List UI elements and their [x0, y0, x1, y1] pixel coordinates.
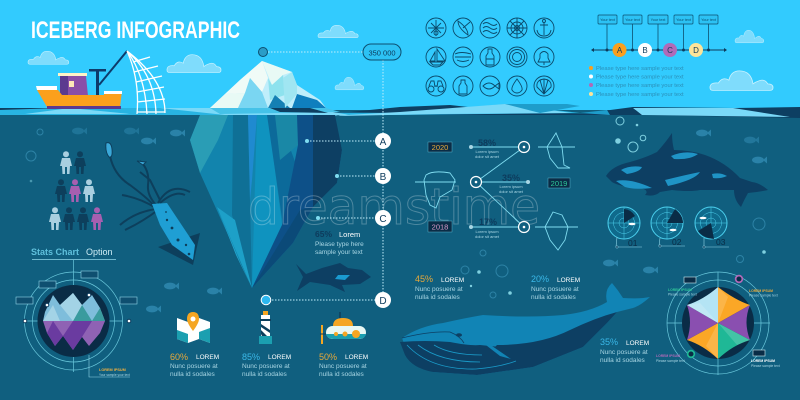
text: 50%: nulla id sodales	[319, 371, 365, 378]
year tag 2020	[428, 142, 452, 152]
line comparison chart: Lorem ipsum	[475, 149, 499, 154]
year tag 2019	[548, 178, 570, 188]
line comparison chart: dolor sit amet	[499, 189, 524, 194]
timeline legend: Please type here sample your text	[596, 74, 684, 80]
icon row one	[426, 18, 554, 38]
text: 50%	[319, 352, 368, 378]
depth marker	[261, 295, 271, 305]
text: 45%: nulla id sodales	[415, 294, 461, 301]
text: 60%: nulla id sodales	[170, 371, 216, 378]
text: 20%: Nunc posuere at	[531, 286, 579, 293]
hexagon chart: Please sample text	[751, 364, 780, 368]
radars: 03	[716, 237, 726, 247]
icon: map	[177, 312, 210, 343]
icon: lighthouse	[259, 311, 272, 344]
line comparison chart: Lorem ipsum	[475, 229, 499, 234]
marker dots	[305, 139, 339, 220]
icon: submarine	[320, 312, 366, 344]
stats chart heading: Stats Chart	[31, 247, 79, 257]
marker C	[375, 210, 391, 226]
text: 35%	[600, 337, 649, 364]
hexagon chart: LOREM IPSUM	[749, 289, 773, 293]
marker C: C	[379, 214, 387, 225]
timeline legend	[589, 66, 684, 98]
line comparison chart: 17%	[479, 217, 497, 227]
year tag 2020: 2020	[432, 143, 448, 152]
line comparison chart	[415, 133, 578, 250]
iceberg outline: top right	[547, 133, 570, 168]
text: 45%: LOREM	[441, 277, 464, 284]
orca	[606, 133, 768, 207]
timeline legend: Please type here sample your text	[596, 92, 684, 98]
line comparison chart: dolor sit amet	[475, 154, 500, 159]
radars: 02	[672, 237, 682, 247]
timeline: Your text	[600, 18, 616, 22]
text: 60%: 60%	[170, 352, 188, 362]
sea surface band	[0, 104, 800, 118]
line comparison chart: Lorem ipsum	[499, 184, 523, 189]
whale	[400, 283, 650, 375]
text: 20%: 20%	[531, 274, 549, 284]
population pill	[363, 44, 401, 60]
timeline	[591, 15, 727, 57]
line comparison chart: 58%	[478, 138, 496, 148]
text: 65%: Please type here	[315, 241, 364, 248]
line comparison chart: dolor sit amet	[475, 234, 500, 239]
timeline: B	[642, 46, 648, 55]
marker B: B	[380, 172, 387, 183]
text: 20%	[531, 274, 580, 301]
hexagon chart: Please sample text	[668, 292, 697, 296]
year tag 2018: 2018	[432, 222, 448, 232]
timeline: Your text	[701, 18, 717, 22]
marker B	[375, 168, 391, 184]
callout connectors	[268, 52, 383, 300]
text: 85%: nulla id sodales	[242, 371, 288, 378]
chart tags	[16, 271, 137, 304]
timeline: Your text	[625, 18, 641, 22]
hexagon chart	[656, 272, 780, 375]
text: 65%: Lorem	[339, 230, 360, 239]
text: 60%	[170, 352, 219, 378]
iceberg below water	[190, 115, 342, 288]
timeline: Your text	[676, 18, 692, 22]
radars: 01	[628, 238, 638, 248]
sky	[0, 0, 800, 110]
population pill: 350 000	[368, 48, 396, 58]
timeline: C	[667, 46, 673, 55]
people pictogram	[49, 151, 103, 230]
hexagon chart: LOREM IPSUM	[668, 288, 692, 292]
hexagon tags	[684, 277, 765, 356]
text: 50%: 50%	[319, 352, 337, 362]
text: 35%: LOREM	[626, 340, 649, 347]
timeline: A	[617, 46, 623, 55]
text: 20%: nulla id sodales	[531, 294, 577, 301]
line comparison chart: 35%	[502, 173, 520, 183]
timeline legend: Please type here sample your text	[596, 83, 684, 89]
text: 35%: 35%	[600, 337, 618, 347]
watermark: dreamstime	[248, 178, 540, 236]
year tag 2018	[428, 221, 452, 232]
text: 35%: nulla id sodales	[600, 357, 646, 364]
hexagon chart: LOREM IPSUM	[656, 354, 680, 358]
text: 65%	[315, 229, 364, 256]
stats chart heading: Option	[86, 247, 113, 257]
iceberg outline: bottom right	[545, 212, 568, 250]
stats chart: Your sample your text	[99, 373, 130, 377]
text: 85%: Nunc posuere at	[242, 363, 290, 370]
stats chart heading	[31, 247, 116, 260]
year tag 2019: 2019	[551, 179, 567, 188]
timeline legend: Please type here sample your text	[596, 66, 684, 72]
hexagon chart: Please sample text	[749, 294, 778, 298]
text: 50%: Nunc posuere at	[319, 363, 367, 370]
text: 85%: LOREM	[268, 354, 291, 361]
stats chart	[16, 260, 137, 377]
text: 35%: Nunc posuere at	[600, 349, 648, 356]
icon row three	[426, 76, 554, 96]
text: 60%: Nunc posuere at	[170, 363, 218, 370]
title: ICEBERG INFOGRAPHIC	[31, 17, 240, 44]
text: 60%: LOREM	[196, 354, 219, 361]
iceberg above water	[210, 61, 340, 114]
marker A	[375, 133, 391, 149]
text: 45%: 45%	[415, 274, 433, 284]
hexagon chart: Please sample text	[656, 359, 685, 363]
text: 85%	[242, 352, 291, 378]
text: 50%: LOREM	[345, 354, 368, 361]
sea	[0, 112, 800, 400]
text: 65%: 65%	[315, 229, 332, 239]
squid	[106, 143, 200, 265]
text: 85%: 85%	[242, 352, 260, 362]
timeline: Your text	[651, 18, 666, 22]
marker D	[375, 292, 391, 308]
tuna	[296, 263, 371, 292]
marker D: D	[379, 296, 387, 307]
text: 20%: LOREM	[557, 277, 580, 284]
hexagon chart: LOREM IPSUM	[751, 359, 775, 363]
stats chart: LOREM IPSUM	[99, 368, 126, 372]
fishing net	[127, 51, 165, 114]
iceberg outline: left	[424, 172, 455, 208]
radars	[608, 207, 729, 248]
icon grid	[426, 18, 554, 96]
fishing boat	[36, 51, 165, 114]
text: 45%: Nunc posuere at	[415, 286, 463, 293]
text: 65%: sample your text	[315, 249, 363, 256]
text: 45%	[415, 274, 464, 301]
icon row two	[426, 47, 554, 67]
timeline: D	[693, 46, 699, 55]
marker A: A	[380, 137, 387, 148]
small fish	[72, 128, 767, 312]
peak marker	[258, 48, 268, 56]
clouds	[28, 25, 773, 90]
bubbles	[26, 117, 766, 298]
